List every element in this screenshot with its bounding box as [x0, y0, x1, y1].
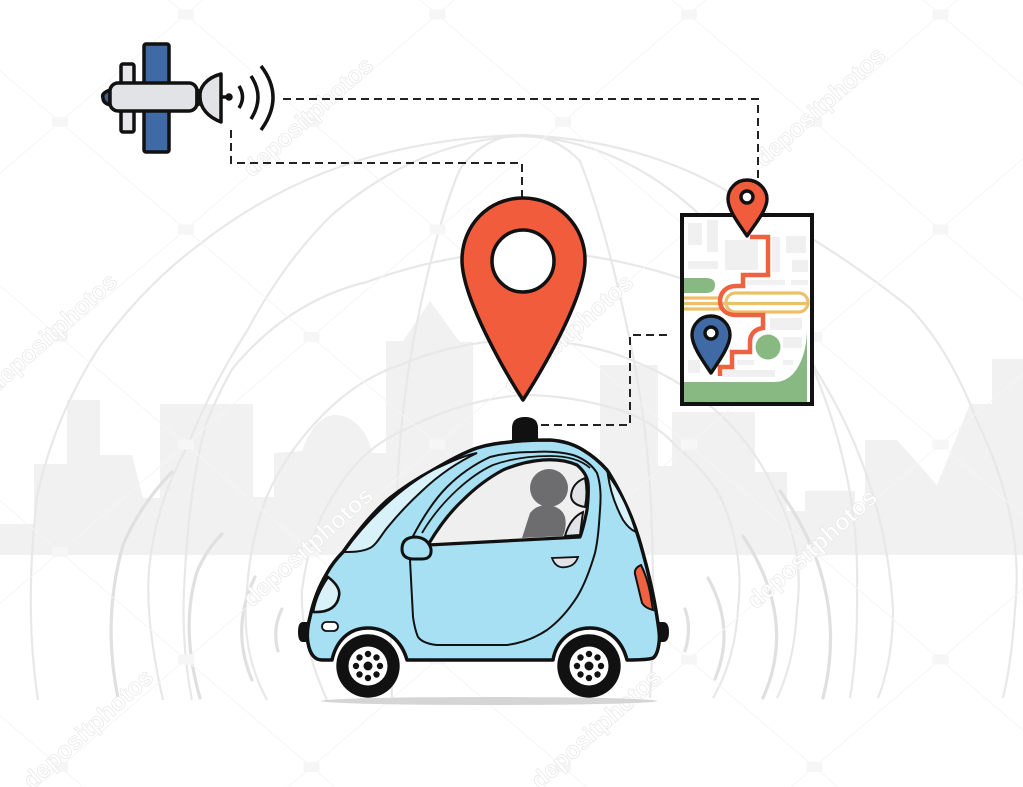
map route	[720, 237, 768, 376]
fog light	[322, 622, 338, 631]
dashed connectors	[231, 99, 758, 425]
car	[298, 417, 669, 698]
passenger	[522, 469, 568, 538]
watermarks: depositphotos	[742, 484, 883, 614]
icon: large location pin	[462, 198, 585, 400]
map green areas	[684, 278, 807, 403]
signal arcs	[31, 135, 1017, 700]
windshield	[344, 453, 477, 552]
tail light	[635, 565, 653, 610]
rear window	[608, 475, 636, 532]
car body	[307, 440, 659, 660]
headlight	[313, 577, 339, 612]
rear wheel	[557, 634, 621, 698]
map panel	[682, 215, 812, 404]
side window	[428, 460, 588, 545]
door handle	[552, 557, 578, 567]
watermarks: depositphotos	[238, 52, 379, 182]
side mirror	[402, 537, 431, 559]
map roads	[684, 293, 808, 312]
watermarks: depositphotos	[750, 42, 891, 172]
seat	[565, 478, 586, 536]
door frame stripe	[422, 456, 590, 533]
city skyline background	[0, 301, 1023, 555]
beacon	[512, 417, 538, 443]
icon: satellite	[103, 44, 273, 152]
front wheel	[336, 634, 400, 698]
bumpers	[298, 622, 669, 642]
door	[410, 452, 601, 645]
icon: red map pin	[728, 180, 767, 236]
car signal waves	[111, 472, 831, 698]
icon: blue map pin	[692, 316, 730, 373]
watermarks: depositphotos	[238, 482, 379, 612]
watermarks: depositphotos	[498, 269, 639, 399]
car shadow	[321, 697, 657, 705]
map blocks	[688, 220, 808, 377]
